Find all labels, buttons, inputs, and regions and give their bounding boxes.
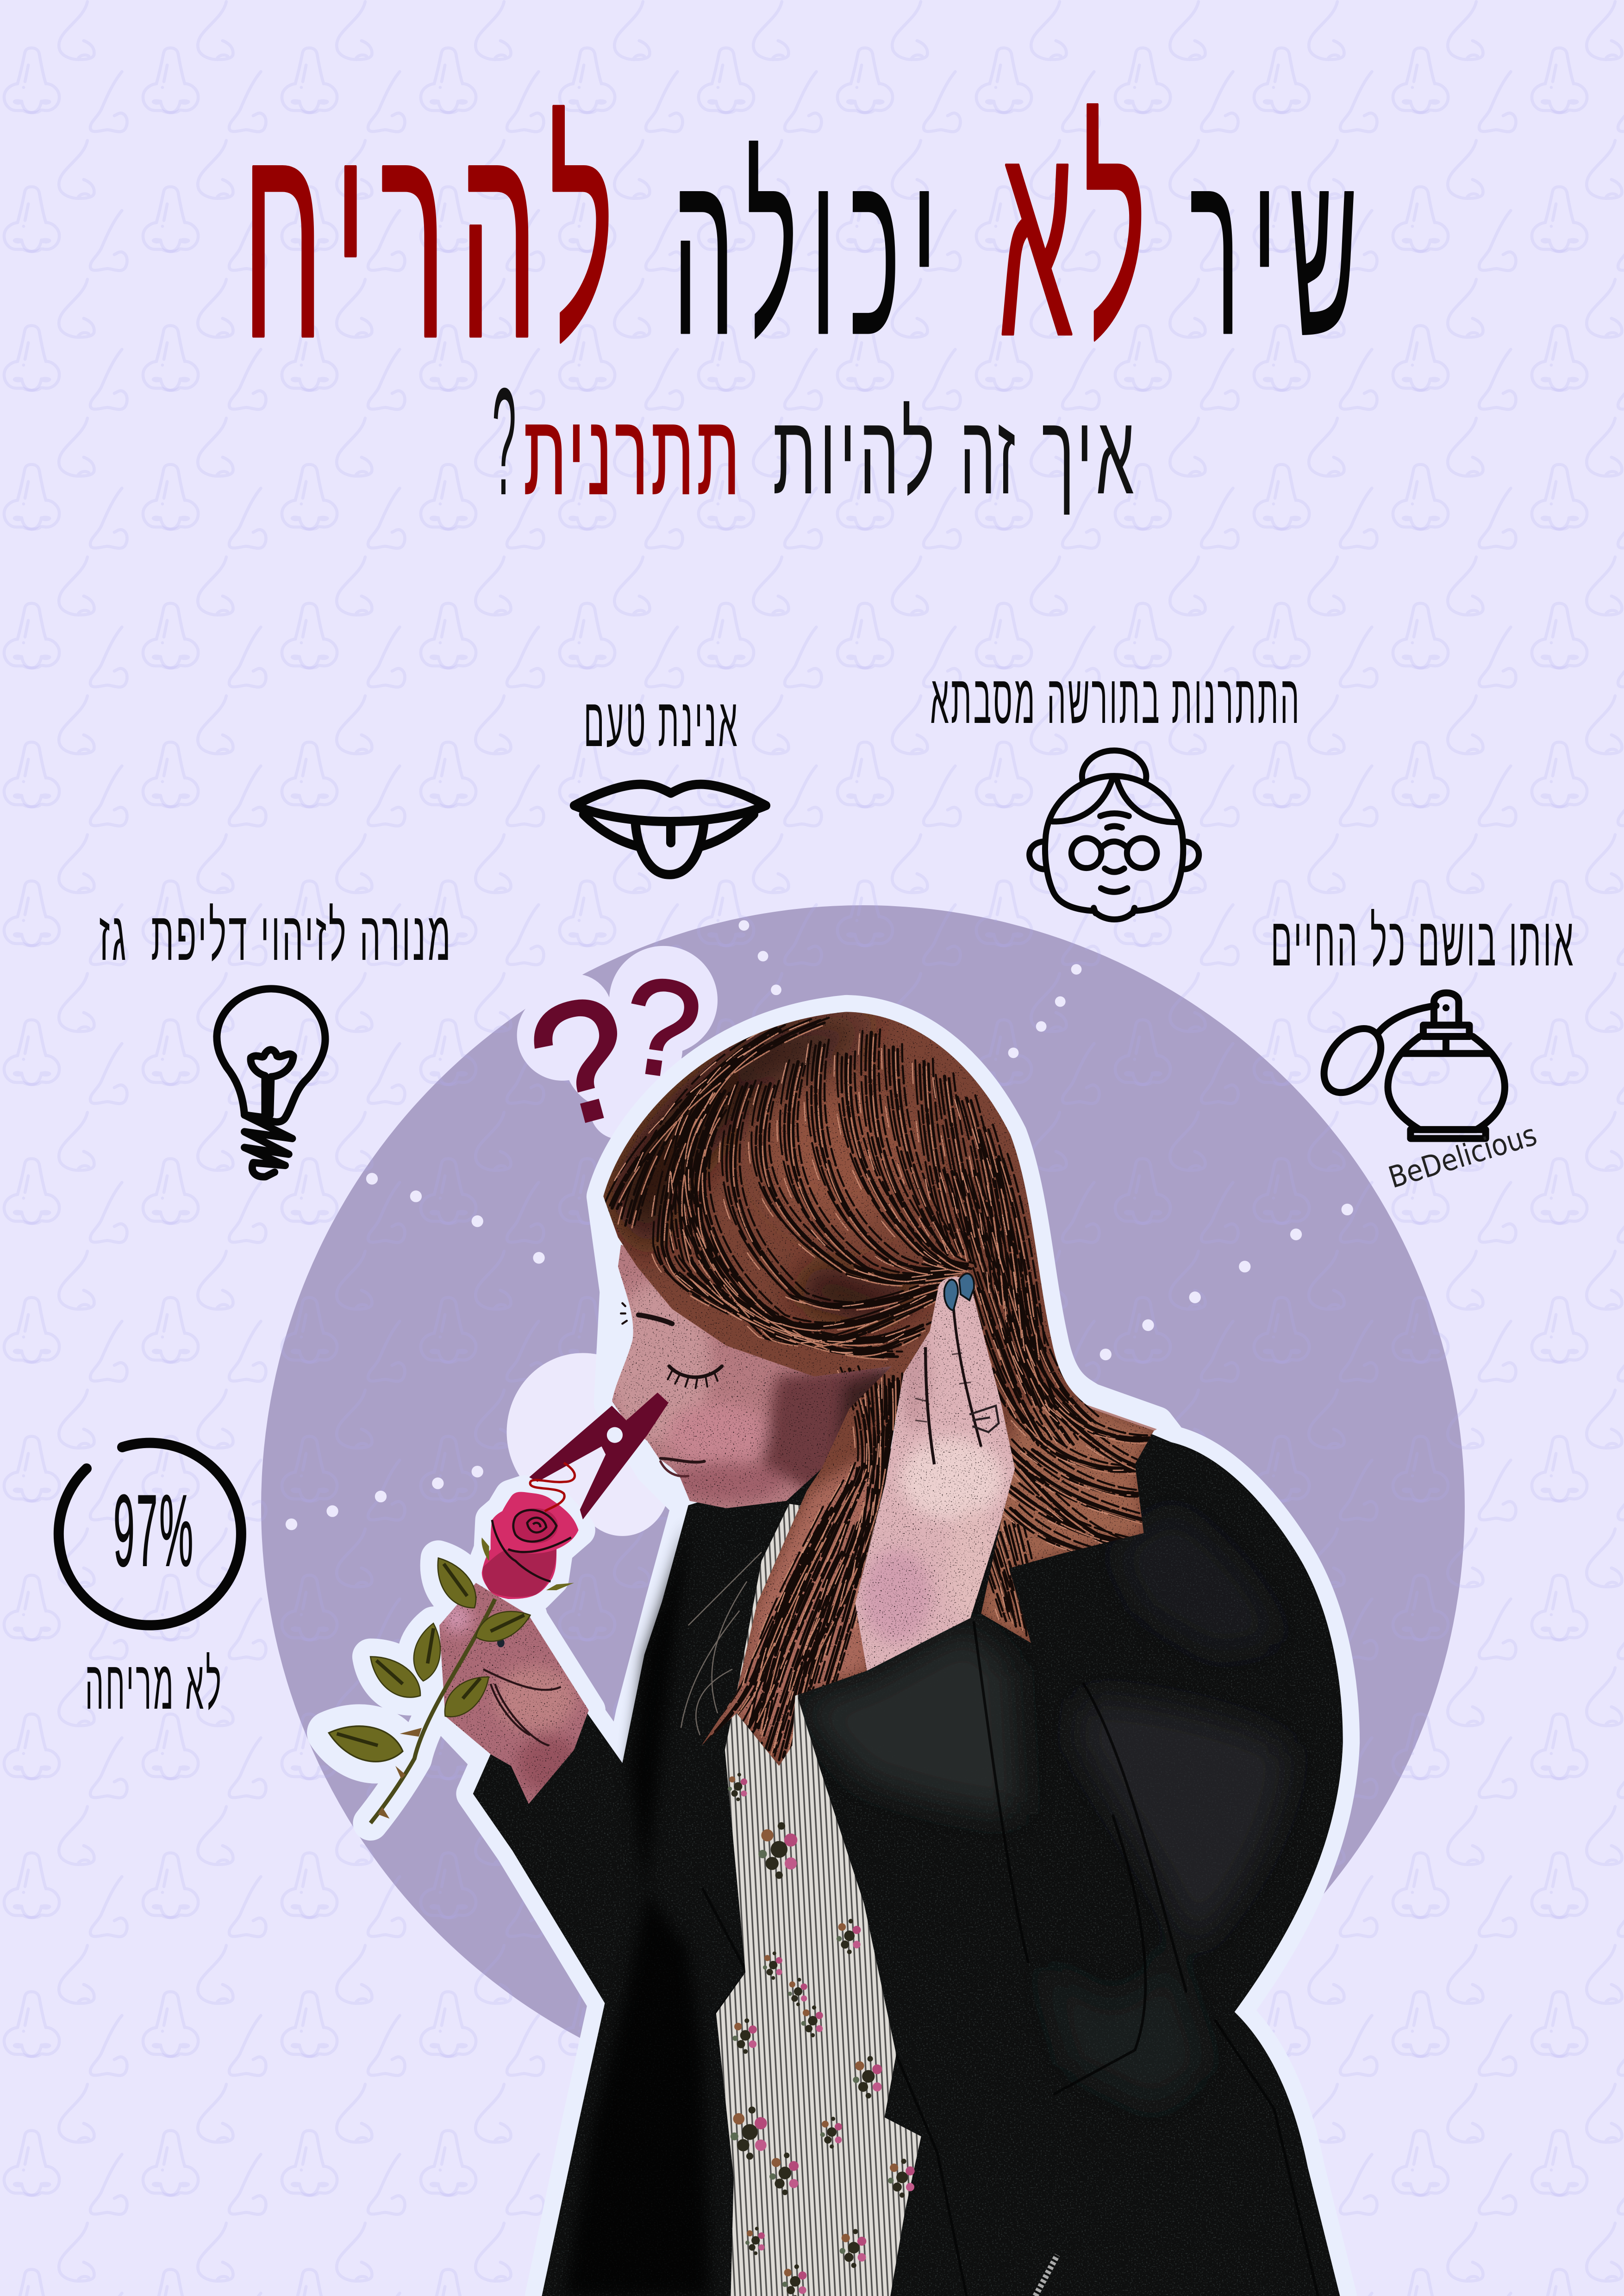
hair light strands bbox=[614, 1026, 1159, 1762]
shirt flowers bbox=[728, 1773, 915, 2296]
clothespin on nose bbox=[529, 1393, 668, 1519]
title: לא bbox=[998, 79, 1156, 394]
jacket bbox=[473, 1406, 1343, 2296]
panel: purple circle bbox=[261, 905, 1465, 2109]
chart: 97 percent ring bbox=[59, 1443, 241, 1625]
icon: lips and tongue bbox=[575, 784, 766, 875]
rose head bbox=[482, 1492, 579, 1599]
jacket shading bbox=[798, 1508, 1289, 2109]
chart: 97 percent ring: 97% bbox=[113, 1474, 195, 1587]
finger lines bbox=[915, 1306, 999, 1464]
face bbox=[612, 1245, 892, 1508]
subtitle: להיות bbox=[773, 391, 938, 517]
rose bbox=[325, 1492, 579, 1823]
subtitle: ? bbox=[492, 356, 516, 527]
holding hand lines bbox=[483, 1669, 561, 1745]
icon: perfume bottle bbox=[1314, 993, 1505, 1139]
question mark right: ? bbox=[613, 947, 710, 1108]
title: יכולה bbox=[673, 120, 950, 384]
hair dark strands bbox=[612, 1020, 1157, 1757]
subtitle: איך bbox=[1042, 391, 1138, 517]
smell squiggle bbox=[530, 1463, 575, 1511]
white outline around figure bbox=[325, 1012, 1343, 2296]
perfume brand text: BeDelicious bbox=[1385, 1118, 1541, 1195]
holding hand bbox=[432, 1574, 600, 1808]
text: אנינת טעם bbox=[584, 683, 739, 761]
face features bbox=[621, 1303, 722, 1476]
bubble shape bbox=[517, 946, 718, 1142]
circle dots bbox=[286, 920, 1353, 1530]
neck skin at the back bbox=[1081, 1403, 1157, 1450]
title: להריח bbox=[243, 81, 628, 396]
icon: grandmother bbox=[1030, 751, 1199, 920]
question mark left: ? bbox=[512, 958, 652, 1165]
icon: light bulb bbox=[217, 989, 325, 1177]
smell cloud behind the nose bbox=[507, 1353, 669, 1536]
dark left jacket panel bbox=[564, 1523, 710, 2296]
text: לא מריחה bbox=[85, 1646, 223, 1724]
subtitle: זה bbox=[960, 391, 1018, 517]
shirt bbox=[716, 1504, 921, 2296]
text: מנורה לזיהוי דליפת גז bbox=[99, 897, 453, 975]
nails bbox=[944, 1274, 974, 1311]
loose hair wisps on jacket bbox=[681, 1552, 762, 1735]
raised hand bbox=[842, 1259, 1032, 1684]
question marks bubble bbox=[512, 946, 718, 1165]
figure: woman with pinched nose bbox=[325, 996, 1343, 2296]
hair bbox=[603, 1012, 1154, 1766]
subtitle bbox=[492, 356, 1138, 527]
jacket fold lines bbox=[703, 1623, 1318, 2296]
subtitle: תתרנית bbox=[524, 391, 743, 517]
zipper bbox=[1035, 2255, 1057, 2296]
